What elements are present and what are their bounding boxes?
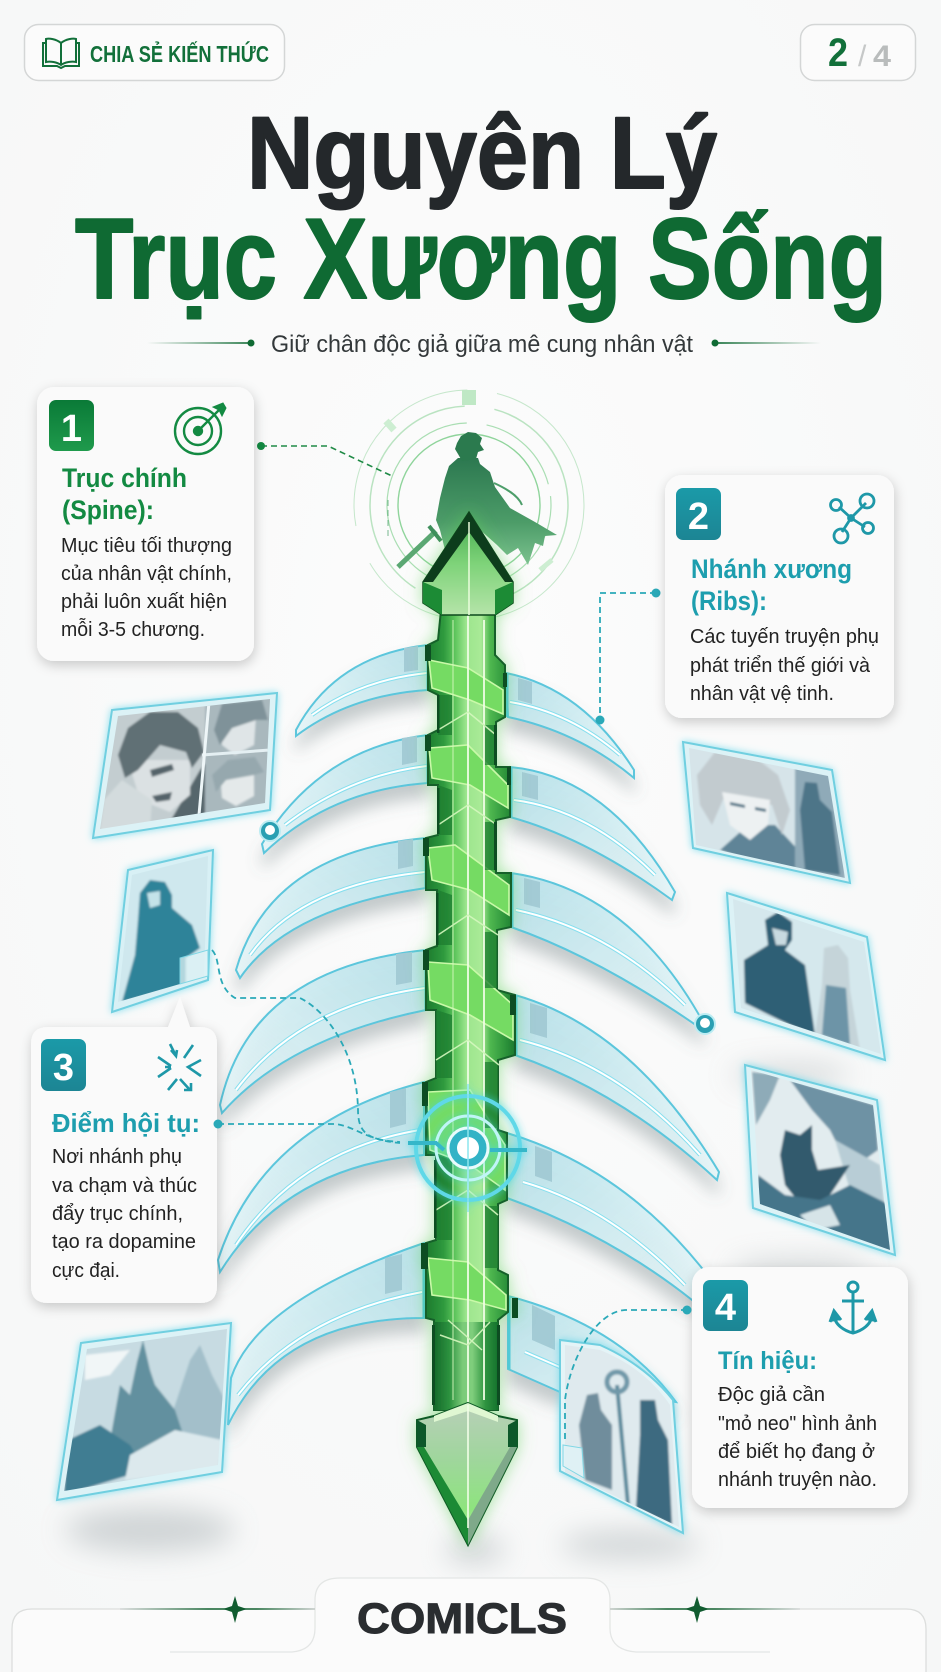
- rib R5: [507, 1133, 715, 1300]
- title: [75, 96, 887, 323]
- body text 4: Độc giả cần: [718, 1384, 825, 1406]
- right bottom face: [220, 768, 254, 806]
- figure: [800, 782, 840, 875]
- spine shaft: [426, 600, 515, 1410]
- hero silhouette: [398, 432, 557, 567]
- target rings: [354, 390, 584, 620]
- icon: network: [830, 494, 874, 543]
- body text 4: "mỏ neo" hình ảnh: [718, 1413, 877, 1435]
- hair: [697, 752, 790, 835]
- panel: card 1 Trục chính: Trục chính: [62, 463, 187, 493]
- panel image 2: silver-haired boy: [680, 740, 855, 890]
- spine highlight lines: [436, 600, 499, 1410]
- panel: card 2 Nhánh xương: Nhánh xương: [691, 554, 852, 584]
- tag: CHIA SẺ KIẾN THỨC: CHIA SẺ KIẾN THỨC: [90, 39, 269, 67]
- rib L5: [218, 1082, 424, 1272]
- page counter: /: [858, 40, 867, 73]
- body text 2: [690, 626, 879, 705]
- distant mountains: [173, 1346, 222, 1440]
- panel: card 4 Tín hiệu: Tín hiệu:: [718, 1347, 817, 1375]
- rib R4: [515, 995, 719, 1180]
- spine facets: bright slanted bands: [428, 660, 513, 1310]
- body text 1: mỗi 3-5 chương.: [61, 618, 205, 641]
- bottom arrowhead: [417, 1403, 517, 1545]
- node on left rib: [260, 821, 280, 841]
- spine: [417, 512, 518, 1545]
- body text 4: nhánh truyện nào.: [718, 1469, 877, 1491]
- girl: [815, 945, 860, 1050]
- joint dark notches: [421, 645, 518, 1405]
- body text 1: Mục tiêu tối thượng: [61, 535, 232, 557]
- panel: card 3 Điểm hội tụ: [31, 997, 217, 1303]
- brand: COMICLS: [357, 1595, 567, 1643]
- panel image 7: two figures and staff: [558, 1340, 688, 1535]
- spine dark facets: [436, 695, 498, 1268]
- face: [128, 760, 190, 812]
- ribs: right side: [506, 673, 719, 1402]
- body text 2: Các tuyến truyện phụ: [690, 626, 879, 648]
- footer: [12, 1578, 926, 1672]
- panel image 1: angry hero: [90, 690, 280, 840]
- eye and mouth: [150, 764, 174, 802]
- panel: card 1 Trục chính: [37, 387, 254, 661]
- icon: converging arrows: [158, 1044, 201, 1090]
- connector: card 1 to hero: [257, 442, 392, 540]
- right top face: [220, 716, 256, 755]
- badge 1: 1: [61, 408, 82, 450]
- badge 2: 2: [688, 496, 709, 538]
- rocks: [758, 1174, 890, 1250]
- star right: [685, 1596, 709, 1623]
- badge 4: 4: [715, 1287, 736, 1329]
- body text 3: va chạm và thúc: [52, 1175, 197, 1197]
- page counter: 4: [873, 40, 891, 73]
- jacket: [171, 764, 206, 818]
- body text 3: đẩy trục chính,: [52, 1203, 183, 1225]
- sword: [398, 526, 441, 567]
- connector: card 3 to node: [212, 950, 400, 1143]
- badge 1: [49, 400, 94, 451]
- panel image 6: castle: [55, 1320, 235, 1500]
- fist: [100, 780, 152, 830]
- body text 4: [718, 1384, 877, 1491]
- body text 3: tạo ra dopamine: [52, 1231, 196, 1253]
- scarf tail: [494, 483, 522, 505]
- foreground rocks: [64, 1424, 134, 1491]
- wing and sky: [790, 1081, 878, 1159]
- body text 3: [52, 1146, 197, 1282]
- body text 2: phát triển thế giới và: [690, 655, 871, 677]
- badge 3: 3: [53, 1047, 74, 1089]
- node on right rib: [695, 1014, 715, 1034]
- ribs: left side: [218, 645, 428, 1425]
- rib R2: [510, 767, 675, 900]
- rib R3: [511, 873, 703, 1030]
- page counter: 2: [828, 31, 848, 75]
- rib L1: [296, 645, 428, 736]
- lower shaft: [434, 1322, 498, 1410]
- rib L4: [220, 950, 426, 1113]
- castle: [110, 1340, 185, 1455]
- body text 3: cực đại.: [52, 1260, 120, 1282]
- rib R1: [506, 673, 634, 778]
- connector: card 4 to image: [565, 1306, 692, 1440]
- left figure: [579, 1393, 612, 1490]
- convergence node: [408, 1084, 527, 1212]
- title: Nguyên Lý: [247, 96, 717, 210]
- panel image 4: couple: [725, 890, 890, 1065]
- badge 3: [41, 1039, 86, 1091]
- soft ground shadows: [65, 1065, 870, 1564]
- hair: [118, 712, 204, 778]
- body text 1: của nhân vật chính,: [61, 563, 232, 585]
- boy: [744, 912, 815, 1035]
- subtitle: Giữ chân độc giả giữa mê cung nhân vật: [271, 331, 693, 358]
- icon: target: [175, 403, 226, 454]
- panel: card 2 Nhánh xương: (Ribs):: [691, 586, 767, 616]
- connector: card 2 to rib: [596, 588, 660, 724]
- figure: [122, 880, 200, 1002]
- panel image 3: hooded figure: [110, 850, 215, 1012]
- rib L2: [262, 735, 428, 853]
- rib L3: [236, 838, 426, 978]
- badge 2: [676, 488, 721, 540]
- tag: CHIA SẺ KIẾN THỨC: [24, 24, 284, 80]
- jacket: [720, 824, 796, 867]
- badge 4: [703, 1280, 748, 1331]
- cape and body: [436, 458, 557, 565]
- body text 1: phải luôn xuất hiện: [61, 591, 227, 613]
- dragon body: [780, 1125, 850, 1210]
- body text 1: [61, 535, 232, 641]
- body text 4: để biết họ đang ở: [718, 1441, 875, 1463]
- panel image 5: dragon: [745, 1065, 895, 1260]
- star left: [223, 1596, 247, 1623]
- hair and head: [455, 432, 484, 461]
- icon: anchor: [830, 1282, 876, 1333]
- icon: open book: [43, 39, 79, 68]
- page counter: [800, 24, 916, 80]
- top arrowhead: [423, 512, 513, 615]
- face: [722, 792, 770, 840]
- rib L6: [228, 1243, 424, 1425]
- rib R6: [508, 1296, 676, 1402]
- panel: card 1 Trục chính: (Spine):: [62, 495, 154, 525]
- subtitle: [147, 331, 821, 358]
- panel: card 2 Nhánh xương: [665, 475, 894, 718]
- panel: card 4 Tín hiệu: [692, 1267, 908, 1508]
- body text 2: nhân vật vệ tinh.: [690, 683, 834, 705]
- staff: [617, 1385, 628, 1505]
- right figure: [636, 1400, 672, 1525]
- body text 3: Nơi nhánh phụ: [52, 1146, 182, 1168]
- panel: card 3 Điểm hội tụ: Điểm hội tụ:: [52, 1108, 200, 1138]
